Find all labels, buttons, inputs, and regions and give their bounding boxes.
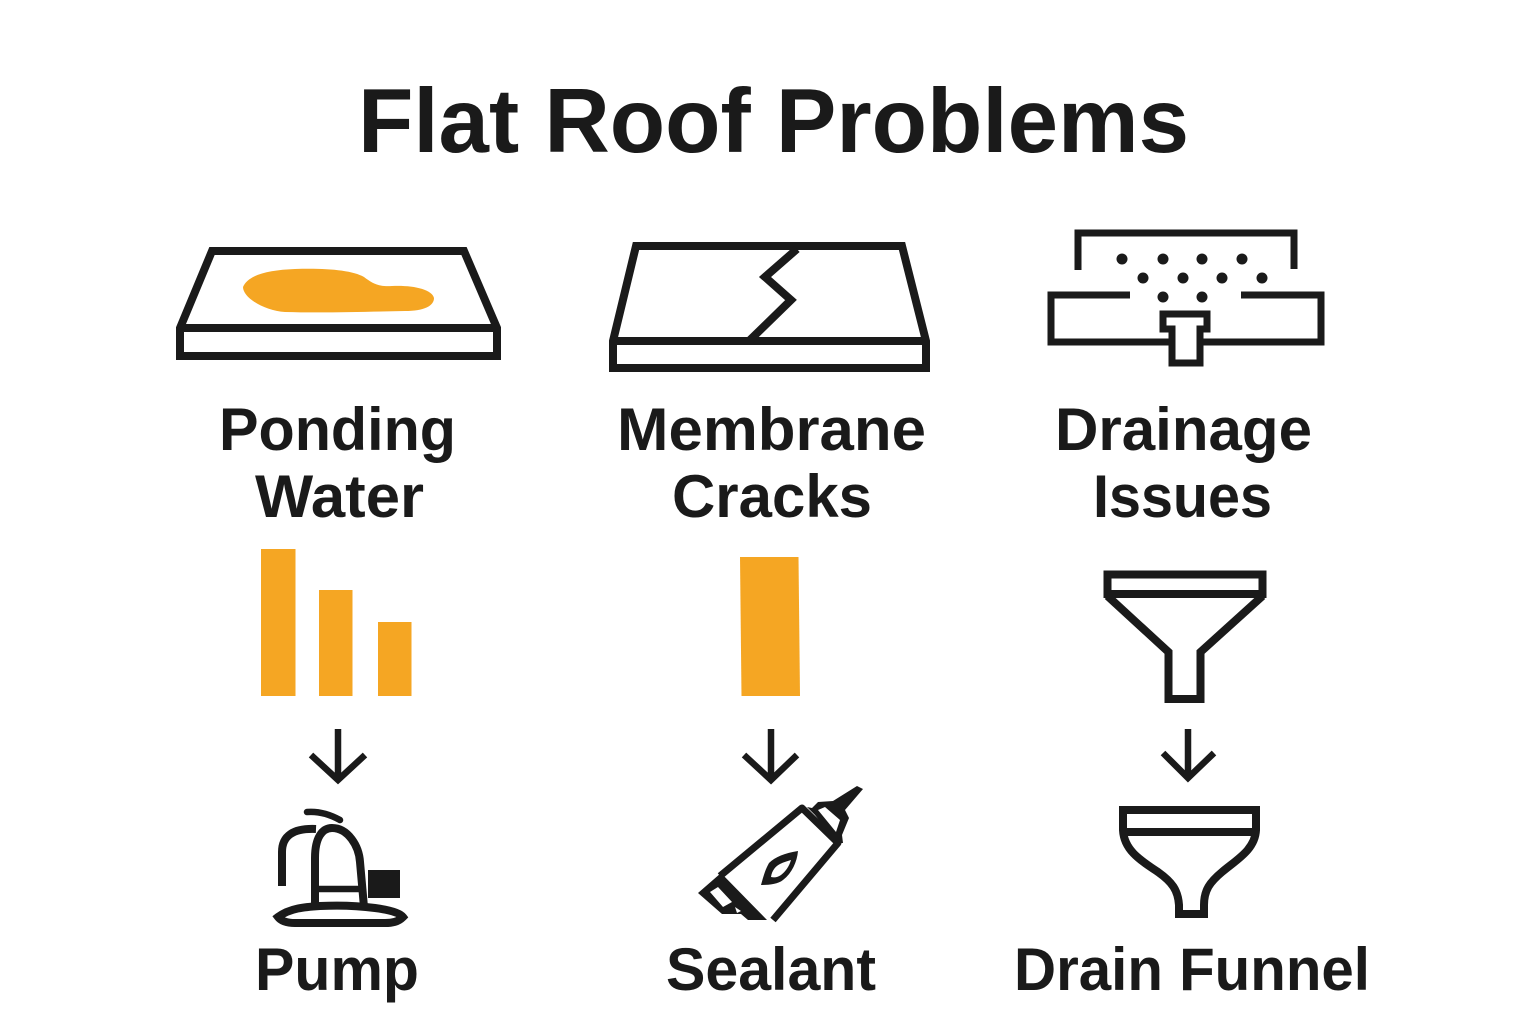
icon: pump [278, 812, 403, 923]
icon: roof drain with water drops [1051, 233, 1321, 363]
label: Ponding Water [219, 396, 456, 530]
icon: curved drain funnel [1123, 810, 1256, 914]
arrow: ponding water to pump [311, 729, 365, 780]
icon: sealant tube [698, 786, 863, 920]
label: Ponding Water: Ponding [219, 396, 456, 463]
icon: roof with membrane crack [613, 246, 926, 368]
label: Membrane Cracks: Cracks [672, 463, 872, 530]
label: Drainage Issues [1055, 396, 1312, 530]
label: Ponding Water: Water [255, 463, 424, 530]
label: Membrane Cracks: Membrane [617, 396, 926, 463]
bar: membrane single bar [740, 557, 800, 696]
label: Drain Funnel: Drain Funnel [1014, 936, 1370, 1003]
label: Drainage Issues: Drainage [1055, 396, 1312, 463]
label: Pump: Pump [255, 936, 419, 1003]
arrow: membrane cracks to sealant [744, 729, 797, 780]
bar chart: three descending bars [261, 549, 412, 696]
label: Drainage Issues: Issues [1093, 463, 1272, 530]
title: Flat Roof Problems [358, 71, 1189, 172]
icon: straight funnel [1108, 574, 1262, 699]
arrow: drainage issues to drain funnel [1163, 729, 1214, 778]
icon: flat roof with ponding water [180, 251, 497, 356]
label: Membrane Cracks [617, 396, 926, 530]
label: Sealant: Sealant [666, 936, 876, 1003]
